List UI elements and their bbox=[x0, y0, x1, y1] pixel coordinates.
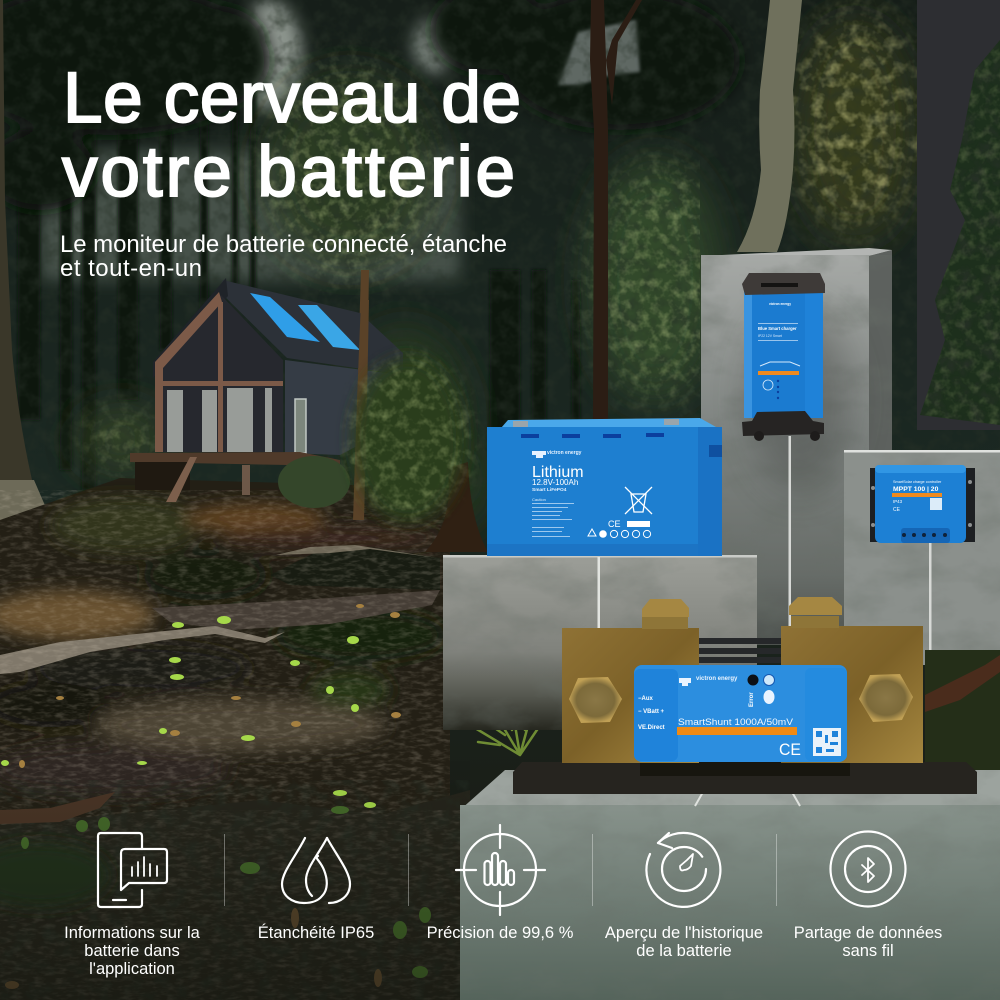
small bright leaves bbox=[1, 616, 376, 808]
brass block left bbox=[562, 628, 699, 763]
large grey trunk right bbox=[917, 0, 1000, 430]
charger mode graphic bbox=[760, 362, 800, 366]
controller label: SmartSolar charge controller bbox=[893, 480, 942, 484]
orange band bbox=[677, 727, 797, 735]
bottom concrete plinth bbox=[460, 770, 1000, 1000]
port labels: −Aux bbox=[638, 696, 654, 702]
wooden frame bbox=[155, 292, 283, 452]
label: l'application bbox=[89, 960, 175, 978]
fern near blocks bbox=[470, 695, 545, 755]
sunlit leaves bbox=[76, 0, 917, 476]
bottom undergrowth bbox=[0, 790, 470, 1000]
tall concrete block bbox=[701, 248, 892, 646]
tree stump right of cabin bbox=[425, 462, 488, 552]
charger status bbox=[763, 380, 773, 390]
plate bolts bbox=[871, 480, 972, 527]
controller qr bbox=[930, 498, 942, 510]
model name: SmartShunt 1000A/50mV bbox=[678, 717, 794, 728]
label: batterie dans bbox=[84, 942, 180, 960]
cabin bbox=[130, 278, 480, 530]
battery branding: victron energy bbox=[547, 450, 582, 456]
dark mound bbox=[270, 547, 440, 590]
window curtains bbox=[167, 388, 272, 452]
lithium battery: Lithium bbox=[532, 464, 584, 481]
pale haze behind trees bbox=[40, 0, 460, 280]
ground base bbox=[0, 478, 450, 1000]
dark trunk centre bbox=[590, 0, 608, 420]
icon: bluetooth bbox=[830, 832, 906, 906]
blue smart charger bbox=[742, 273, 825, 441]
fallen branch bbox=[0, 792, 115, 824]
controller terminals bbox=[901, 528, 950, 543]
title line 2: votre batterie bbox=[62, 133, 515, 212]
side bolt left bbox=[569, 677, 622, 723]
battery clasps bbox=[513, 421, 528, 427]
charger label: Blue Smart charger bbox=[758, 326, 797, 331]
foliage texture bbox=[0, 0, 1000, 520]
moss patch bottom left bbox=[0, 843, 110, 907]
subtitle: et tout-en-un bbox=[60, 255, 202, 282]
label: Aperçu de l'historique bbox=[605, 924, 763, 942]
top bolt right bbox=[789, 597, 842, 628]
battery body bbox=[487, 427, 722, 556]
port labels: − VBatt + bbox=[638, 709, 665, 715]
brass block right bbox=[781, 626, 923, 763]
battery lid bbox=[501, 418, 716, 428]
label: Informations sur la bbox=[64, 924, 201, 942]
side bolt right bbox=[859, 674, 913, 722]
MPPT charge controller: CE bbox=[893, 507, 901, 513]
lithium battery: 12.8V-100Ah bbox=[532, 478, 578, 487]
subtitle bbox=[60, 231, 507, 282]
sky gap through trees bbox=[558, 20, 640, 85]
CE mark: CE bbox=[779, 740, 801, 759]
label bbox=[64, 924, 201, 978]
error led bbox=[748, 674, 758, 686]
icon: target with bars bbox=[456, 825, 545, 915]
battery certifications: CE bbox=[608, 519, 621, 529]
canopy foliage glow bbox=[80, 20, 915, 525]
title: Le cerveau de bbox=[63, 59, 521, 138]
feature: application bbox=[64, 833, 201, 978]
path strips bbox=[152, 590, 440, 630]
bluetooth led bbox=[764, 674, 774, 686]
pale root bbox=[0, 626, 285, 674]
QR code bbox=[813, 728, 841, 756]
error label: Error bbox=[749, 692, 755, 707]
label bbox=[605, 924, 763, 960]
battery handle notch bbox=[709, 445, 722, 457]
charger orange strip bbox=[758, 371, 799, 375]
cabin roof bbox=[218, 280, 403, 375]
charger lines bbox=[758, 323, 798, 341]
label: de la batterie bbox=[636, 942, 732, 960]
MPPT charge controller: IP43 bbox=[893, 499, 903, 504]
label bbox=[794, 924, 942, 960]
bluetooth badge bbox=[764, 690, 774, 704]
bushes near cabin bbox=[278, 340, 480, 530]
label: sans fil bbox=[842, 942, 894, 960]
label: Partage de données bbox=[794, 924, 942, 942]
battery recycling mark bbox=[625, 487, 652, 514]
charger bottom cap bbox=[742, 411, 824, 436]
soil texture bbox=[0, 490, 450, 830]
mounting plate bbox=[870, 468, 975, 542]
blue smart charger: victron energy bbox=[769, 302, 791, 306]
top bolt left bbox=[642, 599, 689, 629]
gable wall bbox=[155, 295, 283, 452]
shunt base bbox=[513, 762, 977, 794]
ground colour patches bbox=[0, 497, 445, 796]
side wall bbox=[285, 360, 416, 455]
thin trunk by cabin bbox=[353, 270, 369, 520]
birch trunk bbox=[737, 0, 802, 252]
feature: wireless bbox=[794, 832, 942, 960]
mound crest bbox=[276, 545, 438, 558]
shunt module bbox=[634, 665, 847, 762]
port labels: VE.Direct bbox=[638, 725, 665, 731]
feature: precision bbox=[427, 825, 574, 942]
thin tree in front of cabin bbox=[353, 300, 369, 520]
icon: water drops bbox=[282, 838, 350, 903]
deck bbox=[130, 452, 340, 466]
shunt brand logo bbox=[679, 678, 691, 686]
SmartShunt bbox=[513, 597, 977, 794]
shunt bars bbox=[695, 638, 785, 663]
side window bbox=[295, 399, 306, 453]
icon: phone with chart bubble bbox=[98, 833, 167, 907]
MPPT charge controller bbox=[870, 465, 975, 543]
port labels bbox=[638, 696, 665, 731]
fir tree right bbox=[915, 40, 1000, 430]
battery slots bbox=[521, 433, 664, 438]
feature dividers bbox=[224, 834, 776, 906]
subtitle: Le moniteur de batterie connecté, étanche bbox=[60, 231, 507, 258]
icon: history gauge bbox=[646, 833, 720, 907]
label: Étanchéité IP65 bbox=[258, 923, 374, 942]
battery logo bbox=[532, 451, 546, 458]
MPPT charge controller: MPPT 100 | 20 bbox=[893, 486, 939, 493]
feature: history bbox=[605, 833, 763, 960]
battery fine print: Caution bbox=[532, 497, 546, 502]
controller body bbox=[875, 465, 966, 543]
charger top cap bbox=[742, 273, 825, 295]
shunt brand: victron energy bbox=[696, 676, 738, 682]
right concrete block bbox=[844, 450, 1000, 770]
dark canopy top left bbox=[0, 0, 740, 210]
dim undergrowth leaves bbox=[21, 806, 431, 978]
lithium battery: Smart LiFePO4 bbox=[532, 487, 567, 493]
middle concrete block bbox=[443, 555, 757, 730]
dead leaves bbox=[5, 604, 401, 989]
left big tree trunk bbox=[0, 0, 88, 600]
charger body bbox=[744, 288, 823, 418]
feature: waterproof bbox=[258, 838, 374, 942]
label: Précision de 99,6 % bbox=[427, 924, 574, 942]
solar panels bbox=[250, 293, 360, 350]
background tree trunks bbox=[18, 60, 580, 490]
lithium battery bbox=[487, 418, 722, 556]
bottom vignette bbox=[0, 760, 470, 1000]
blue smart charger: IP22 12V Smart bbox=[758, 334, 782, 338]
